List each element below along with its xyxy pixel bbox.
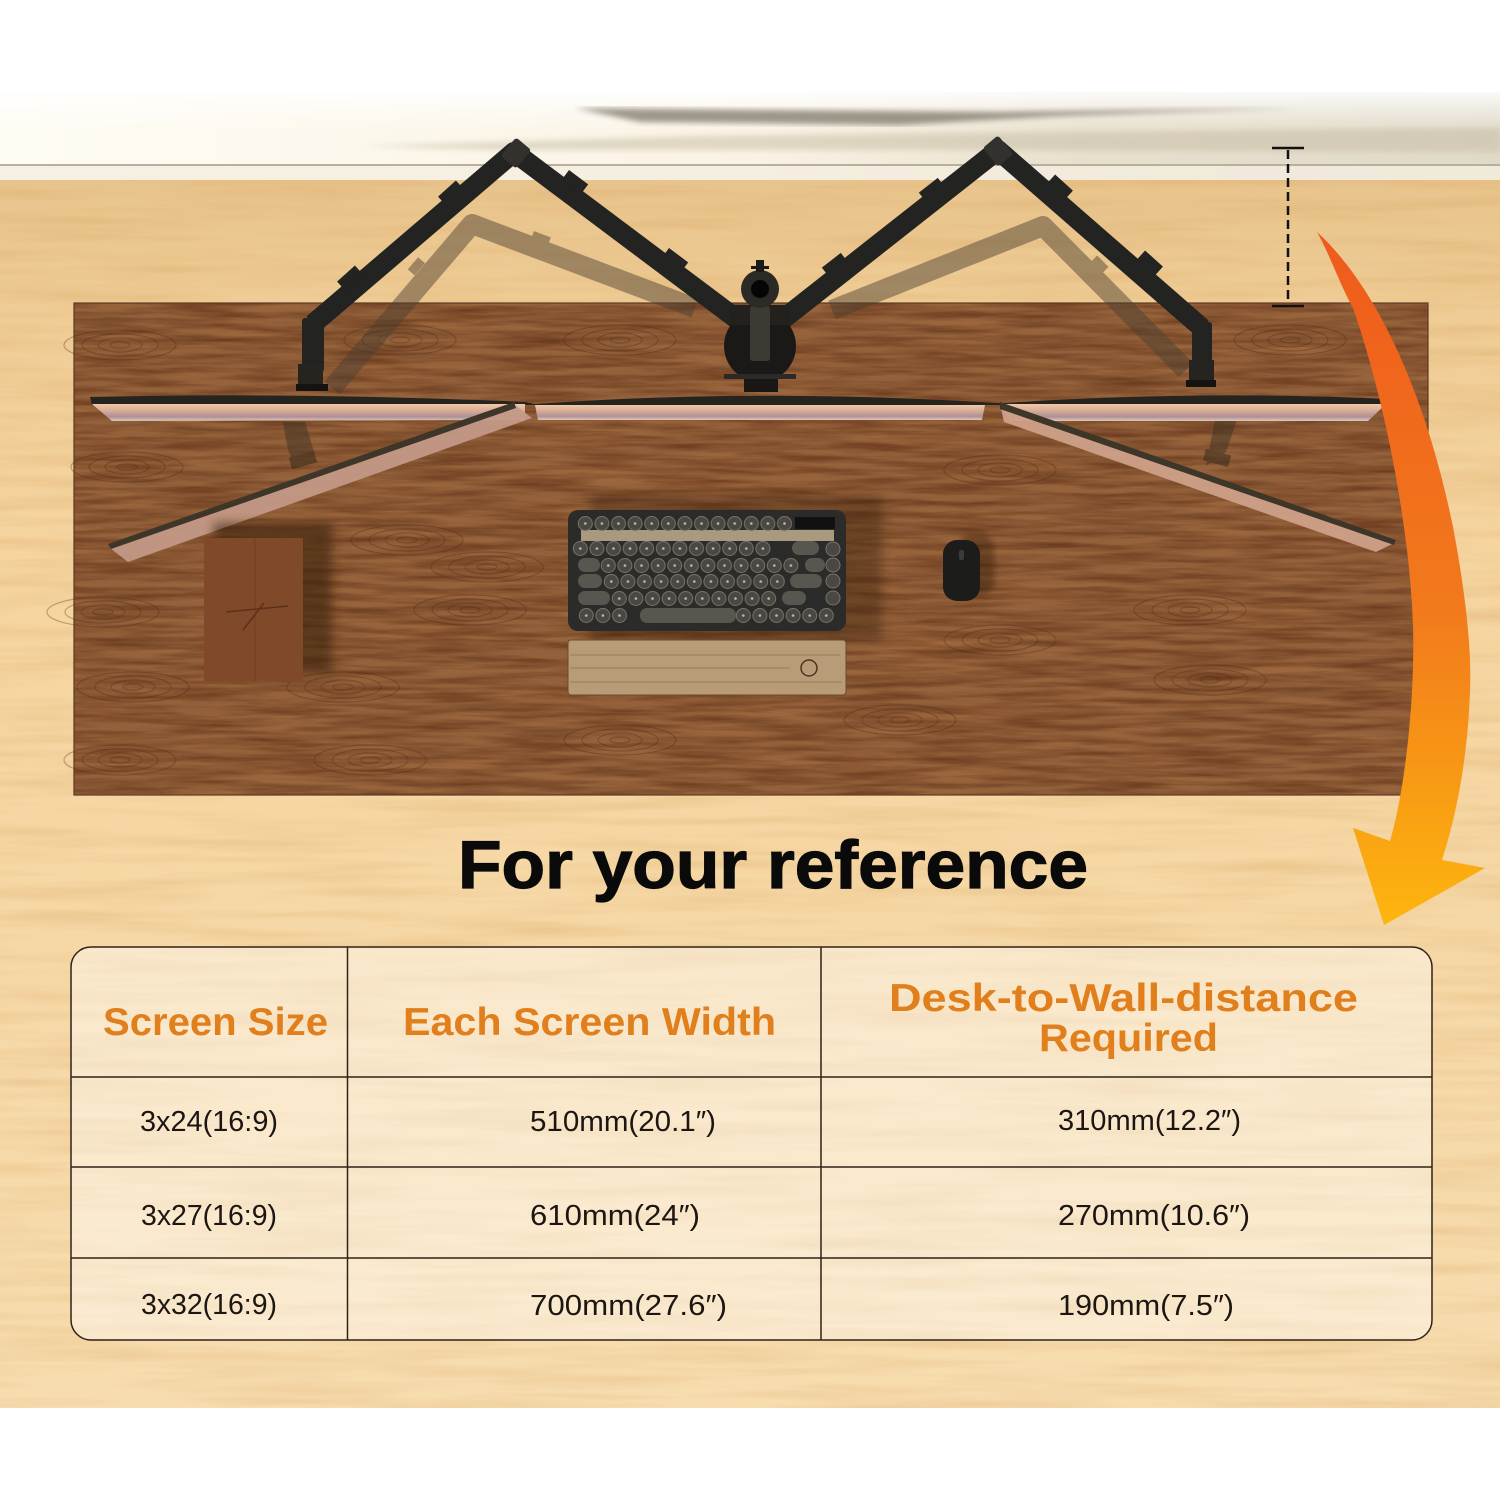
right monitor arm [782,135,1216,387]
row 27 inch: 610mm(24″) [530,1200,700,1232]
wall distance dimension marker [1272,148,1304,306]
centre pole and clamp [724,260,796,392]
header: desk-to-wall distance: Required [1039,1017,1218,1060]
left monitor arm [296,137,738,391]
header: screen size: Screen Size [103,1001,328,1044]
row 27 inch: 3x27(16:9) [141,1200,277,1232]
keyboard [568,496,882,642]
swung-out monitors [108,402,1396,562]
mouse [943,534,994,601]
ghost arm positions [283,224,1237,469]
header: desk-to-wall distance [889,977,1358,1060]
row 27 inch [141,1200,1250,1232]
wall at top of scene [0,92,1500,180]
row 24 inch: 310mm(12.2″) [1058,1105,1241,1137]
row 24 inch: 3x24(16:9) [140,1106,278,1138]
wrist rest [568,640,846,695]
row 32 inch: 190mm(7.5″) [1058,1290,1234,1322]
book [204,523,332,681]
row 27 inch: 270mm(10.6″) [1058,1200,1250,1232]
row 32 inch [141,1289,1234,1322]
desk top [47,303,1428,795]
tripled monitors, front screen [90,395,1388,421]
header: each screen width: Each Screen Width [403,1001,776,1044]
title: For your reference [458,827,1088,903]
header: desk-to-wall distance: Desk-to-Wall-distance [889,977,1358,1020]
table of screen sizes [71,947,1432,1340]
row 24 inch: 510mm(20.1″) [530,1106,716,1138]
curved orange arrow [1317,232,1485,925]
row 32 inch: 700mm(27.6″) [530,1290,727,1322]
row 32 inch: 3x32(16:9) [141,1289,277,1321]
row 24 inch [140,1105,1241,1138]
